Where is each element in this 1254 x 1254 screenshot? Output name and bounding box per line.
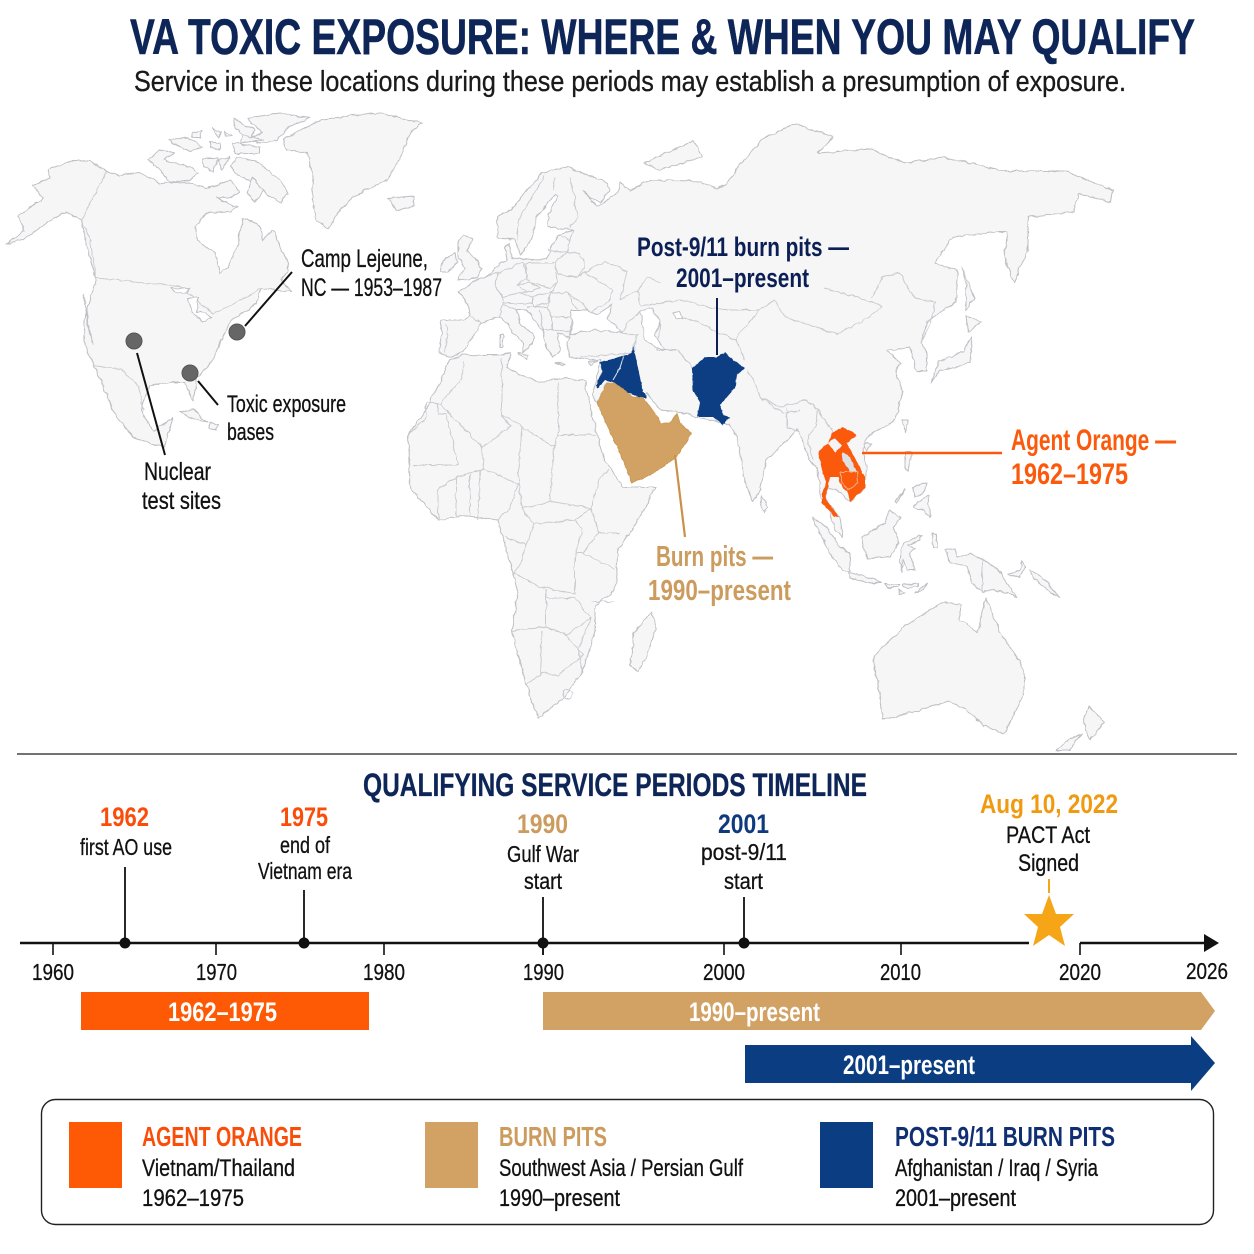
map label: post-9/11 burn pits: Post-9/11 burn pits — [637, 232, 849, 262]
legend item: post-9/11 burn pits: POST-9/11 BURN PITS [895, 1121, 1115, 1152]
map label: nuclear test sites: Nuclear [144, 458, 211, 486]
period bar: post-9/11 burn pits: 2001–present [843, 1050, 975, 1080]
timeline heading: QUALIFYING SERVICE PERIODS TIMELINE [363, 767, 867, 803]
milestone: 2001: 2001 [718, 809, 769, 839]
map label: toxic exposure bases: Toxic exposure [227, 391, 346, 418]
map label: nuclear test sites [142, 458, 221, 515]
legend item: post-9/11 burn pits [820, 1121, 1115, 1212]
leader line: nuclear test sites [137, 353, 165, 455]
period bar: post-9/11 burn pits [745, 1036, 1215, 1091]
landmass: North America [6, 161, 291, 447]
map label: Camp Lejeune: NC — 1953–1987 [301, 274, 442, 302]
marker: Camp Lejeune [229, 324, 245, 340]
legend item: burn pits: Southwest Asia / Persian Gulf [499, 1155, 743, 1182]
map label: toxic exposure bases [227, 391, 346, 446]
map label: Camp Lejeune: Camp Lejeune, [301, 245, 428, 273]
highlighted region: Afghanistan and Pakistan [692, 352, 745, 425]
legend item: Agent Orange: 1962–1975 [142, 1185, 244, 1212]
map label: nuclear test sites: test sites [142, 487, 221, 515]
legend [42, 1100, 1214, 1224]
map label: burn pits: Burn pits — [656, 541, 773, 573]
landmass: UK, Ireland and Mediterranean islands [440, 235, 597, 366]
axis year labels: 2020 [1059, 959, 1101, 985]
axis year labels: 2026 [1186, 958, 1228, 984]
legend item: burn pits: 1990–present [499, 1185, 620, 1212]
world map [6, 113, 1176, 750]
milestone: 2001: post-9/11 [701, 839, 787, 865]
leader line: post-9/11 burn pits [716, 298, 718, 355]
milestone: 1990 [507, 809, 579, 955]
map label: post-9/11 burn pits [637, 232, 849, 293]
legend item: burn pits: BURN PITS [499, 1121, 607, 1152]
legend item: post-9/11 burn pits: 2001–present [895, 1185, 1016, 1212]
map label: Camp Lejeune [301, 245, 442, 302]
marker: toxic exposure bases [182, 365, 198, 381]
map label: Agent Orange [1011, 424, 1176, 491]
axis year labels: 1960 [32, 959, 74, 985]
period bar: Agent Orange: 1962–1975 [168, 997, 277, 1027]
axis year labels: 1970 [196, 959, 237, 985]
legend item: burn pits [425, 1121, 743, 1212]
landmass: Arctic islands, Greenland and Iceland [148, 113, 422, 229]
milestone: PACT Act [980, 789, 1118, 946]
map label: burn pits: 1990–present [648, 575, 791, 607]
milestone: PACT Act: Aug 10, 2022 [980, 789, 1118, 819]
landmass: Africa [408, 353, 655, 718]
map label: Agent Orange: 1962–1975 [1011, 458, 1128, 491]
milestone: 1990: start [524, 868, 563, 894]
leader line: Camp Lejeune [245, 272, 292, 326]
axis year labels [32, 958, 1228, 985]
legend item: post-9/11 burn pits: Afghanistan / Iraq / Syria [895, 1155, 1098, 1182]
map label: post-9/11 burn pits: 2001–present [676, 263, 809, 293]
period bar: Agent Orange [81, 992, 369, 1030]
highlighted region: Arabian Peninsula [597, 383, 691, 483]
landmass: Southeast Asia and Japan islands [760, 267, 1060, 598]
milestone: PACT Act: Signed [1018, 850, 1079, 877]
milestone: 1962 [80, 802, 172, 948]
legend item: Agent Orange [69, 1121, 302, 1212]
axis year labels: 2000 [703, 959, 745, 985]
milestone: 1975: Vietnam era [258, 858, 352, 884]
leader line: Agent Orange [862, 452, 1002, 454]
milestone: PACT Act: PACT Act [1006, 822, 1090, 849]
highlighted exposure regions [596, 345, 865, 517]
period bar: burn pits [543, 992, 1215, 1030]
period bar: burn pits: 1990–present [689, 997, 820, 1027]
marker: nuclear test sites [126, 333, 142, 349]
leader line: burn pits [675, 455, 685, 537]
highlighted region: Iraq and Syria [596, 345, 647, 398]
milestone: 2001 [701, 809, 787, 948]
legend item: Agent Orange: AGENT ORANGE [142, 1121, 302, 1152]
landmass: Madagascar [630, 612, 656, 672]
milestone: 1962: 1962 [100, 802, 149, 832]
subtitle: Service in these locations during these periods may establish a presumption of exposure. [134, 66, 1126, 98]
timeline axis [20, 934, 1219, 955]
axis year labels: 1990 [523, 959, 564, 985]
milestone: 1990: 1990 [517, 809, 568, 839]
milestone: 1975 [258, 802, 352, 948]
milestone: 1962: first AO use [80, 834, 172, 860]
map label: Agent Orange: Agent Orange — [1011, 424, 1176, 457]
milestone: 1990: Gulf War [507, 841, 579, 867]
highlighted region: Vietnam and Thailand [818, 427, 865, 517]
milestone: 1975: 1975 [280, 802, 328, 832]
base map landmasses [6, 113, 1113, 750]
leader line: toxic exposure bases [198, 381, 218, 405]
landmass: Eurasia [438, 124, 1113, 537]
milestone: 1975: end of [280, 832, 330, 858]
map label: burn pits [648, 541, 791, 607]
axis year labels: 1980 [363, 959, 405, 985]
landmass: Australia and New Zealand [873, 598, 1105, 750]
legend item: Agent Orange: Vietnam/Thailand [142, 1155, 295, 1182]
axis year labels: 2010 [880, 959, 921, 985]
map label: toxic exposure bases: bases [227, 419, 274, 446]
milestone: 2001: start [724, 868, 764, 894]
